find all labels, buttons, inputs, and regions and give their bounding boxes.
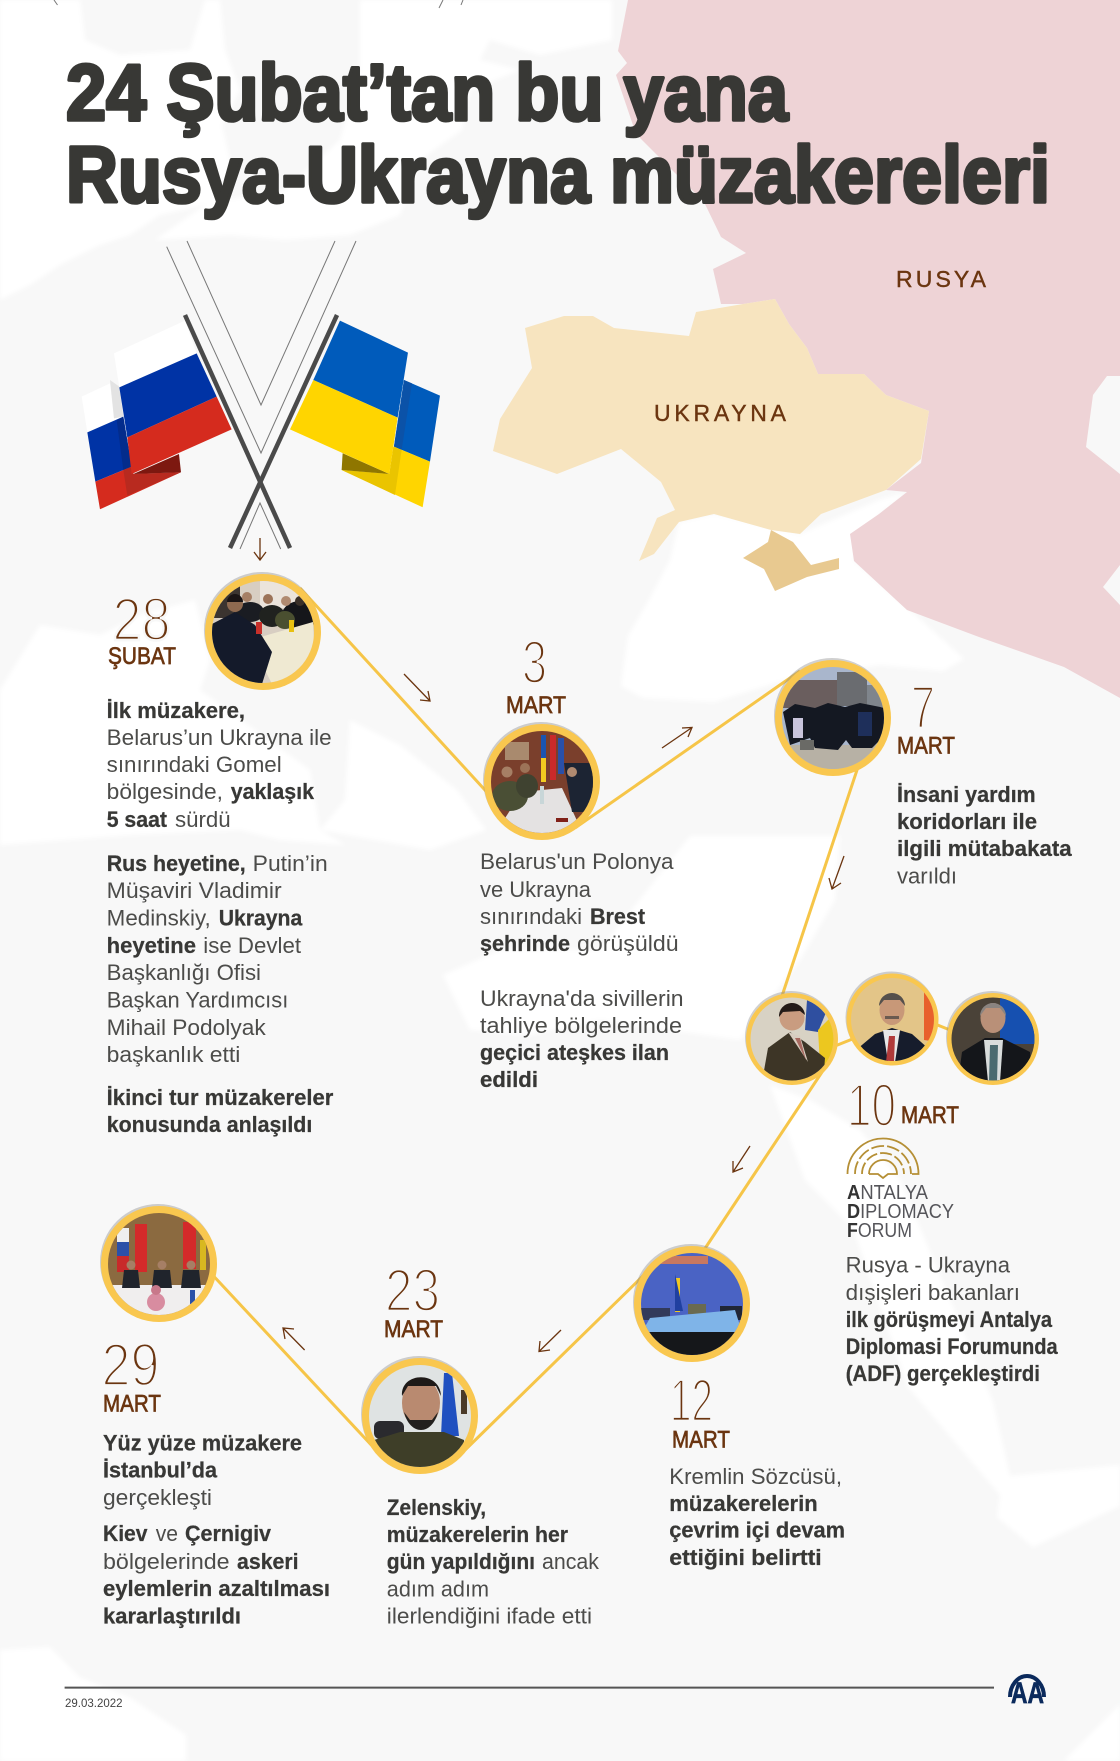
text: Istanbul talks <box>103 1430 330 1628</box>
text: Brest talks: Brest <box>590 904 646 929</box>
text: Zelensky statement: müzakerelerin her <box>387 1522 568 1547</box>
text: Brest talks: şehrinde <box>480 931 570 956</box>
photo: 29 Mart Istanbul talks <box>100 1204 217 1322</box>
text: first talks: Putin’in <box>253 851 328 876</box>
text: Brest talks: görüşüldü <box>577 931 679 956</box>
text: Kremlin spokesman: çevrim içi devam <box>669 1518 845 1542</box>
date: 10 Mart: MART <box>901 1102 959 1129</box>
date: 7 Mart <box>897 674 955 760</box>
text: humanitarian corridors: koridorları ile <box>897 809 1037 834</box>
date: 7 Mart: 7 <box>911 674 935 741</box>
text: Zelensky statement: ilerlendiğini ifade etti <box>387 1604 592 1628</box>
text: first talks: sınırındaki Gomel <box>107 752 282 777</box>
title <box>66 48 1050 219</box>
date: 12 Mart: MART <box>672 1426 730 1454</box>
Russian flag <box>82 321 232 509</box>
text: Istanbul talks: Çernigiv <box>185 1521 272 1546</box>
block: 23 Mart <box>384 1257 600 1628</box>
arrow: 12 Mart to 23 Mart <box>539 1330 561 1352</box>
date: 12 Mart: 12 <box>670 1367 713 1434</box>
map: Ukraine <box>493 299 929 561</box>
text: first talks: heyetine <box>107 933 196 958</box>
text: Kremlin spokesman: ettiğini belirtti <box>669 1545 822 1570</box>
date: 29 Mart: 29 <box>102 1332 160 1398</box>
text: humanitarian corridors: İnsani yardım <box>897 782 1036 807</box>
date: 23 Mart: 23 <box>385 1257 440 1324</box>
text: first talks: Rus heyetine, <box>107 851 246 876</box>
text: Brest talks: tahliye bölgelerinde <box>480 1013 682 1038</box>
map: Russia <box>616 0 1120 698</box>
footer date: 29.03.2022 <box>65 1696 123 1710</box>
date: 3 Mart: 3 <box>522 629 547 696</box>
photo: 12 Mart video meeting <box>633 1244 750 1362</box>
text: first talks: Müşaviri Vladimir <box>107 878 282 903</box>
text: first talks: İlk müzakere, <box>107 698 245 723</box>
block: 28 Şubat <box>107 586 334 1137</box>
text: foreign ministers meeting: Rusya - Ukrayna <box>846 1253 1011 1278</box>
date: 23 Mart <box>384 1257 443 1343</box>
block: 29 Mart <box>102 1332 330 1628</box>
date: 7 Mart: MART <box>897 733 955 760</box>
text: foreign ministers meeting <box>846 1253 1058 1386</box>
text: first talks: konusunda anlaşıldı <box>107 1112 312 1137</box>
text: Brest talks: ve Ukrayna <box>480 877 592 902</box>
arrow: 10 Mart to 12 Mart <box>733 1146 750 1172</box>
crossed flags <box>54 0 463 549</box>
photo: 23 Mart Zelensky <box>361 1356 478 1474</box>
label: RUSYA: RUSYA <box>896 266 987 292</box>
text: Istanbul talks: ve <box>156 1521 178 1546</box>
text: first talks: Başkan Yardımcısı <box>107 988 288 1013</box>
text: Brest talks: Ukrayna'da sivillerin <box>480 986 684 1011</box>
block: 12 Mart <box>669 1367 845 1570</box>
text: first talks: yaklaşık <box>231 779 315 804</box>
text: first talks: ise Devlet <box>203 933 301 958</box>
Ukrainian flag <box>290 321 440 507</box>
text: Zelensky statement: Zelenskiy, <box>387 1495 486 1520</box>
text: Kremlin spokesman: Kremlin Sözcüsü, <box>669 1464 842 1489</box>
text: humanitarian corridors: ilgili mütabakata <box>897 836 1072 861</box>
text: Istanbul talks: kararlaştırıldı <box>103 1604 241 1628</box>
text: foreign ministers meeting: dışişleri bakanları <box>846 1280 1020 1305</box>
date: 28 Şubat: ŞUBAT <box>108 643 176 670</box>
text: first talks: Mihail Podolyak <box>107 1015 267 1040</box>
photo: Kuleba <box>745 991 838 1085</box>
date: 28 Şubat: 28 <box>112 586 170 653</box>
text: Brest talks: geçici ateşkes ilan <box>480 1040 669 1065</box>
text: first talks <box>107 698 334 1137</box>
text: Istanbul talks: İstanbul’da <box>103 1458 218 1482</box>
text: Brest talks: sınırındaki <box>480 904 582 929</box>
logo: Antalya Diplomacy Forum: FORUM <box>847 1220 912 1242</box>
photo: 28 Şubat first talks <box>204 572 321 690</box>
text: first talks: bölgesinde, <box>107 779 223 804</box>
date: 10 Mart <box>847 1072 959 1139</box>
date: 23 Mart: MART <box>384 1316 443 1343</box>
text: Istanbul talks: gerçekleşti <box>103 1485 212 1510</box>
text: Istanbul talks: askeri <box>237 1549 299 1574</box>
text: first talks: 5 saat <box>107 807 168 832</box>
text: Istanbul talks: bölgelerinde <box>103 1549 230 1574</box>
footer rule <box>65 1687 994 1689</box>
block: 7 Mart <box>897 674 1072 888</box>
arrow: 23 Mart to 29 Mart <box>283 1328 305 1350</box>
text: Brest talks: Belarus'un Polonya <box>480 849 674 874</box>
logo: AA: AA <box>1011 1677 1044 1710</box>
text: Kremlin spokesman: müzakerelerin <box>669 1491 818 1516</box>
text: Brest talks: edildi <box>480 1067 538 1092</box>
arrow: 3 Mart to 7 Mart <box>662 728 692 748</box>
text: Zelensky statement: adım adım <box>387 1576 489 1602</box>
title: 24 Şubat’tan bu yana <box>66 48 788 137</box>
logo: Antalya Diplomacy Forum <box>847 1138 954 1242</box>
text: Zelensky statement: gün yapıldığını <box>387 1549 535 1574</box>
arrow: 28 Şubat to 3 Mart <box>404 674 430 701</box>
text: Istanbul talks: Kiev <box>103 1521 148 1546</box>
date: 29 Mart: MART <box>103 1390 161 1418</box>
photo: Çavuşoğlu <box>846 972 938 1066</box>
map: Crimea <box>743 530 839 591</box>
text: foreign ministers meeting: ilk görüşmeyi Antalya <box>846 1307 1053 1332</box>
text: first talks: başkanlık etti <box>107 1042 240 1067</box>
date: 10 Mart: 10 <box>847 1072 896 1139</box>
text: first talks: Başkanlığı Ofisi <box>107 960 261 985</box>
date: 3 Mart <box>506 629 566 719</box>
arrow: flags to 28 Şubat <box>254 538 266 560</box>
text: Brest talks <box>480 849 684 1092</box>
text: first talks: Belarus’un Ukrayna ile <box>107 725 332 750</box>
text: first talks: sürdü <box>175 807 231 832</box>
label: UKRAYNA: UKRAYNA <box>654 400 787 426</box>
photo: Lavrov <box>946 991 1039 1085</box>
text: Zelensky statement: ancak <box>542 1549 600 1574</box>
text: Istanbul talks: eylemlerin azaltılması <box>103 1576 330 1601</box>
text: Istanbul talks: Yüz yüze müzakere <box>103 1430 302 1456</box>
text: foreign ministers meeting: Diplomasi Forumunda <box>846 1334 1058 1359</box>
text: humanitarian corridors <box>897 782 1072 888</box>
photo: 7 Mart civilians <box>774 658 891 776</box>
text: Kremlin spokesman <box>669 1464 845 1570</box>
text: first talks: Medinskiy, <box>107 906 211 931</box>
text: foreign ministers meeting: (ADF) gerçekleştirdi <box>846 1361 1040 1386</box>
text: humanitarian corridors: varıldı <box>897 864 957 888</box>
route line <box>207 588 955 1453</box>
text: Zelensky statement <box>387 1495 600 1628</box>
photo: 3 Mart Brest talks <box>483 722 600 840</box>
date: 3 Mart: MART <box>506 692 566 719</box>
text: first talks: Ukrayna <box>219 906 303 931</box>
block: 3 Mart <box>480 629 684 1092</box>
text: first talks: İkinci tur müzakereler <box>107 1085 334 1110</box>
arrow: 7 Mart to 10 Mart <box>829 856 844 889</box>
logo: Antalya Diplomacy Forum: ANTALYA <box>847 1182 929 1204</box>
logo: Antalya Diplomacy Forum: DIPLOMACY <box>847 1201 954 1223</box>
block: 10 Mart <box>846 1072 1058 1386</box>
